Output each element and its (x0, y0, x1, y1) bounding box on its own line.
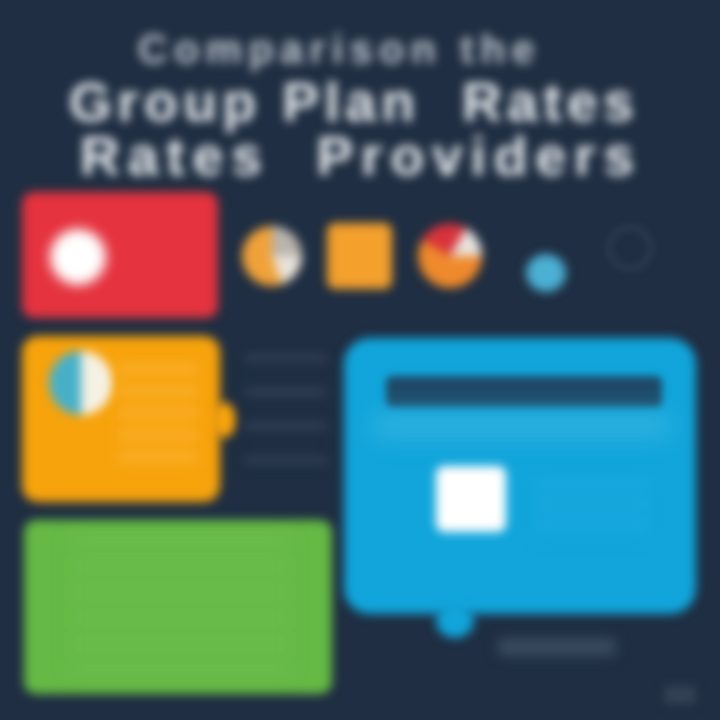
icon: orange pie circle (234, 218, 310, 294)
title (64, 26, 642, 187)
arrow: orange card pointer (212, 402, 236, 438)
text block: dark middle labels (248, 354, 324, 464)
title line 3: Rates Providers (80, 125, 642, 187)
icon: white square (436, 466, 506, 532)
icon: red orange pie (410, 216, 490, 296)
icon: red card white circle (50, 229, 106, 285)
arrow: blue card bottom pointer (436, 604, 474, 638)
icon: small blue circle (526, 254, 566, 292)
orange card text lines (118, 365, 198, 465)
green card text (70, 536, 290, 676)
icon: corner mark (664, 686, 696, 704)
label lines (245, 355, 327, 467)
icon: orange square (327, 223, 392, 289)
panel: blue card (344, 338, 696, 614)
icon: faint outline circle (608, 226, 652, 270)
blue card glow band (372, 414, 672, 438)
icon: orange card circle (41, 343, 119, 423)
panel: green card (24, 520, 332, 694)
orange card text (108, 361, 199, 465)
panel: orange card (22, 336, 220, 502)
panel: red card (22, 192, 218, 318)
text block: caption under blue card (498, 638, 616, 656)
blue card header bar (386, 376, 662, 408)
title line 1: Comparison the (138, 26, 541, 72)
blue card text (535, 480, 650, 540)
green card text lines (70, 536, 290, 676)
title line 2: Group Plan Rates (69, 71, 639, 133)
